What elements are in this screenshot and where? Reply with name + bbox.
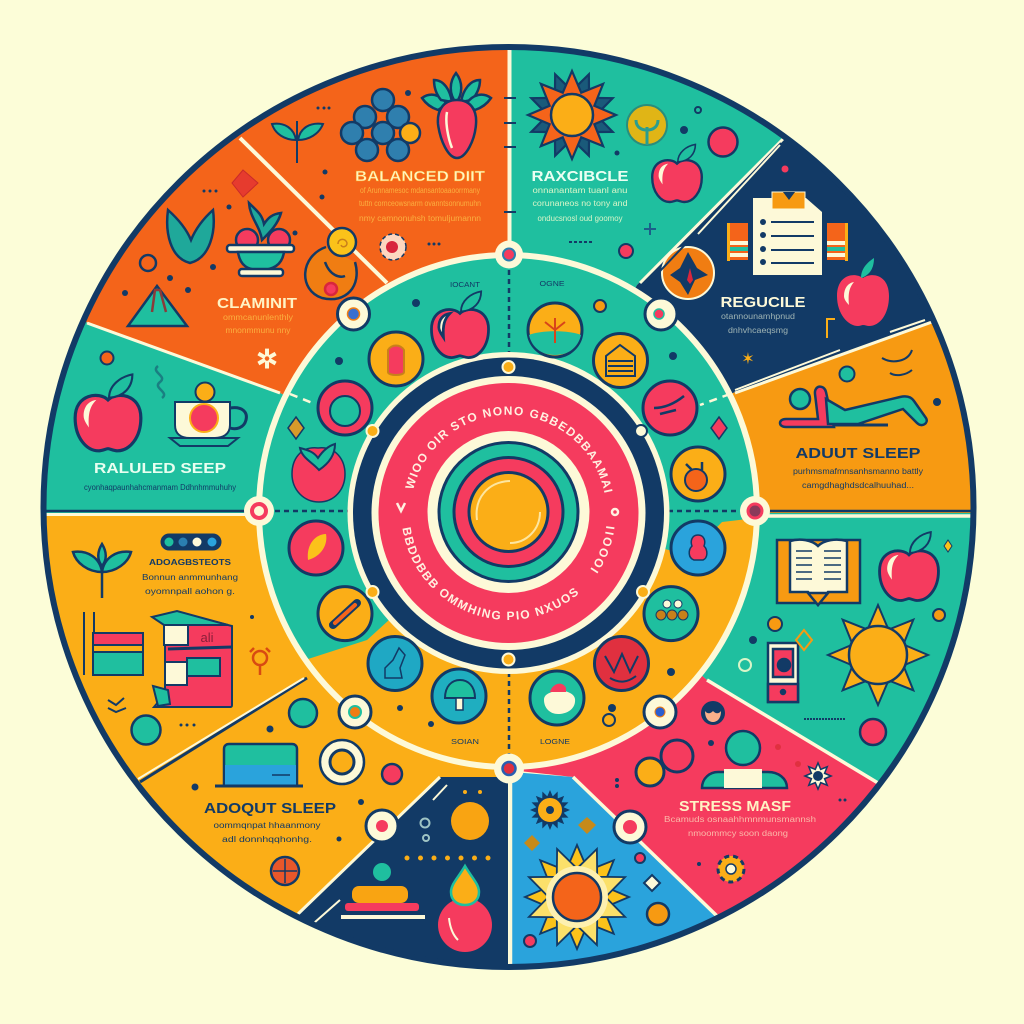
badge: crown red — [594, 636, 648, 690]
central rings — [348, 352, 670, 674]
icon: teal badge — [132, 716, 160, 744]
icon: tent triangle — [128, 286, 187, 326]
middle ring outline — [259, 255, 757, 767]
dotted line — [407, 856, 492, 860]
icon: plant — [73, 544, 131, 598]
small marks in balanced diet — [202, 90, 440, 246]
icon: flame and red ball — [438, 866, 492, 952]
beads on navy ring — [366, 361, 649, 666]
icon: stacked capsule — [341, 863, 425, 919]
node: upper left — [338, 298, 370, 330]
panel: balanced diet and claminit (orange) — [83, 47, 508, 510]
icon: apple — [880, 532, 938, 600]
icon: sun — [515, 58, 629, 172]
badge: apple — [431, 291, 489, 358]
connector nodes — [244, 240, 770, 843]
small marks in adult sleep — [840, 350, 940, 405]
amber part of middle ring — [305, 512, 756, 766]
circular text: right: IOOOII — [590, 526, 614, 574]
title: adoqut sleep: ADOQUT SLEEP — [204, 800, 336, 817]
text: claminit description — [223, 313, 293, 335]
badge: bottle — [369, 332, 423, 386]
icon: diamond — [232, 170, 258, 197]
text: books description: Bonnun anmmunhang — [142, 573, 238, 582]
badge: landscape — [528, 303, 582, 357]
text: balanced diet description: tuttn cornceowsnarm ovanntsonnumuhn — [359, 199, 481, 208]
text: adoqut description: oommqnpat hhaanmony — [214, 821, 320, 830]
icon: large sun — [509, 829, 645, 965]
small marks in book panel — [739, 540, 952, 745]
text: claminit description: mnonmmunu nny — [226, 326, 290, 335]
panel: suns (blue) — [509, 772, 718, 967]
text: raxcicle description — [532, 186, 628, 223]
icon: linked circles — [636, 740, 693, 786]
small marks in candle panel — [420, 790, 482, 841]
badge: pink hand — [289, 521, 343, 575]
node: left — [244, 496, 274, 526]
text: stress description: Bcamuds osnaahhmnmunsmannsh — [664, 815, 816, 824]
arc paths for circular text — [413, 415, 604, 493]
text: claminit description: ommcanunlenthly — [223, 313, 293, 322]
text: regucile description: otannounamhpnud — [721, 312, 795, 321]
title: raxcicle: RAXCIBCLE — [532, 168, 628, 185]
node: top — [495, 240, 523, 268]
circular text: bottom: BBDDBBB OMMHING PIO NXUOS — [402, 527, 578, 620]
text: books description — [142, 558, 238, 596]
icon: steam swirl — [156, 366, 164, 398]
node: stress connector — [614, 811, 646, 843]
icon: lying figure — [780, 387, 927, 427]
icon: right stacked bars — [827, 223, 848, 261]
panel: book and sun (teal, right) — [508, 513, 974, 784]
text: adult sleep description: purhmsmafmnsanhsmanno battly — [793, 467, 923, 476]
badges around ring — [289, 291, 725, 725]
icon: sprout — [272, 121, 323, 163]
small ring — [140, 255, 156, 271]
middle ring — [259, 255, 757, 767]
divider between amber sectors — [140, 678, 307, 782]
badge: amber fruit — [671, 447, 725, 501]
text: stress description — [664, 815, 816, 838]
panel: adult sleep and books (amber, lower left) — [44, 513, 508, 916]
node: sleep connector — [366, 810, 398, 842]
small marks in suns panel — [524, 817, 669, 947]
text: books description: ADOAGBSTEOTS — [149, 558, 232, 567]
text: balanced diet description: of Arunnamesoc mdansantoaaoorrmany — [360, 186, 480, 195]
badge: red squiggle — [643, 381, 697, 435]
icon: left stacked bars — [727, 223, 748, 261]
icon: small sun — [524, 784, 576, 836]
icon: orange blob badge — [662, 247, 714, 299]
node: lower left — [339, 696, 371, 728]
icon: apple — [75, 374, 141, 451]
text: adult sleep description: camgdhaghdsdcalhuuhad... — [802, 481, 914, 490]
text: adoqut description — [214, 821, 320, 844]
panel: raxcicle (teal) — [511, 47, 784, 510]
badge: mushroom — [432, 669, 486, 723]
node: lower right — [644, 696, 676, 728]
icon: tea cup — [170, 382, 246, 446]
icon: framed chart — [84, 612, 143, 675]
icon: pink circle with mark — [708, 128, 738, 156]
icon: phone — [768, 643, 798, 702]
badge: pink and teal circle — [318, 381, 372, 435]
title: adult sleep: ADUUT SLEEP — [796, 445, 920, 462]
icon: squiggle — [108, 698, 126, 712]
small dots in claminit — [122, 204, 298, 296]
text: stress description: nmoommcy soon daong — [688, 829, 788, 838]
icon: beads — [162, 535, 220, 549]
icon: blueberries — [341, 89, 420, 161]
panel: adult sleep (amber, right) — [508, 320, 974, 513]
title: claminit: CLAMINIT — [217, 295, 297, 312]
panel: relaxed sleep (teal, left) — [43, 321, 508, 513]
small labels in middle ring: OGNE — [540, 281, 565, 288]
icon: fruit bowl — [227, 203, 294, 276]
panel: regucile (navy) — [508, 137, 934, 510]
title: stress management: STRESS MASF — [679, 798, 791, 815]
short dashed diagonals — [290, 394, 730, 405]
icon: orange dot — [100, 352, 114, 364]
badge: blue teal hand — [368, 636, 422, 690]
text: regucile description — [721, 312, 795, 335]
small labels in middle ring — [450, 281, 570, 746]
divider between orange sectors — [240, 138, 387, 283]
badge: teal cluster — [644, 587, 698, 641]
icon: white asterisk: ✲ — [256, 344, 278, 374]
panel: stress management (pink) — [508, 510, 880, 918]
icon: sun — [828, 605, 928, 705]
text: adult sleep description — [793, 467, 923, 490]
icon: flower — [380, 234, 406, 260]
icon: laptop — [215, 744, 303, 786]
node: upper right — [645, 298, 677, 330]
small labels in middle ring: IOCANT — [450, 282, 481, 289]
icon: stacked books: ali — [200, 630, 214, 645]
icon: clipboard checklist — [753, 192, 822, 275]
icon: looped swirl — [305, 228, 357, 299]
text: raxcicle description: corunaneos no tony and — [532, 199, 628, 208]
small marks in middle ring — [288, 299, 727, 727]
text: raxcicle description: onducsnosl oud goomoy — [538, 214, 622, 223]
icon: orange ball — [451, 802, 489, 840]
icon: twin leaves — [167, 210, 214, 263]
icon: gear — [805, 763, 831, 789]
icon: open book — [777, 540, 860, 605]
text: balanced diet description: nmy camnonuhsh tomuljumannn — [359, 214, 481, 223]
title: balanced diet: BALANCED DIIT — [355, 168, 485, 185]
icon: red round badge — [271, 857, 299, 885]
icon: pink dot — [382, 764, 402, 784]
text: regucile description: dnhvhcaeqsmg — [728, 326, 788, 335]
icon: small flower figure — [250, 648, 270, 675]
small labels in middle ring: SOIAN — [451, 739, 479, 746]
icon: apple — [837, 258, 889, 326]
icon: ring — [320, 740, 364, 784]
badge: diagonal band — [318, 587, 372, 641]
small marks in regucile — [741, 166, 835, 368]
small marks in stress — [615, 740, 846, 866]
divider highlight — [138, 678, 304, 779]
circular text: top: WIOO OIR STO NONO GBBEDBBAAMAI — [405, 406, 612, 493]
icon: face badge — [701, 701, 725, 725]
node: right — [740, 496, 770, 526]
small marks lower left — [180, 615, 422, 842]
text: raxcicle description: onnanantam tuanl anu — [532, 186, 628, 195]
small marks in regucile: ✶ — [741, 351, 755, 368]
node: bottom — [494, 754, 524, 784]
dashed axis lines — [275, 270, 740, 755]
icon: stacked books — [152, 611, 232, 707]
badge: tomato — [292, 444, 345, 502]
badge: cup — [530, 671, 584, 725]
text: relaxed description: cyonhaqpaunhahcmanmam Ddhnhmmuhuhy — [84, 483, 236, 492]
panel: candle (navy, bottom) — [296, 777, 508, 967]
text: adoqut description: adl donnhqqhonhg. — [222, 835, 312, 844]
icon: person — [702, 731, 787, 788]
badge: blue figure — [671, 521, 725, 575]
icon: apple — [652, 144, 702, 202]
title: relaxed sleep: RALULED SEEP — [94, 460, 226, 477]
text: balanced diet description — [359, 186, 481, 223]
badge: striped cake — [594, 334, 648, 388]
icon: yellow flower — [718, 856, 744, 882]
icon: lemon — [627, 105, 667, 145]
icon: strawberry — [422, 73, 491, 158]
icon: teal ball — [289, 699, 317, 727]
marks around circular text — [397, 503, 618, 515]
text: books description: oyomnpall aohon g. — [145, 587, 235, 596]
title: regucile: REGUCILE — [720, 294, 806, 311]
small labels in middle ring: LOGNE — [540, 739, 570, 746]
small marks in raxcicle — [569, 107, 701, 258]
